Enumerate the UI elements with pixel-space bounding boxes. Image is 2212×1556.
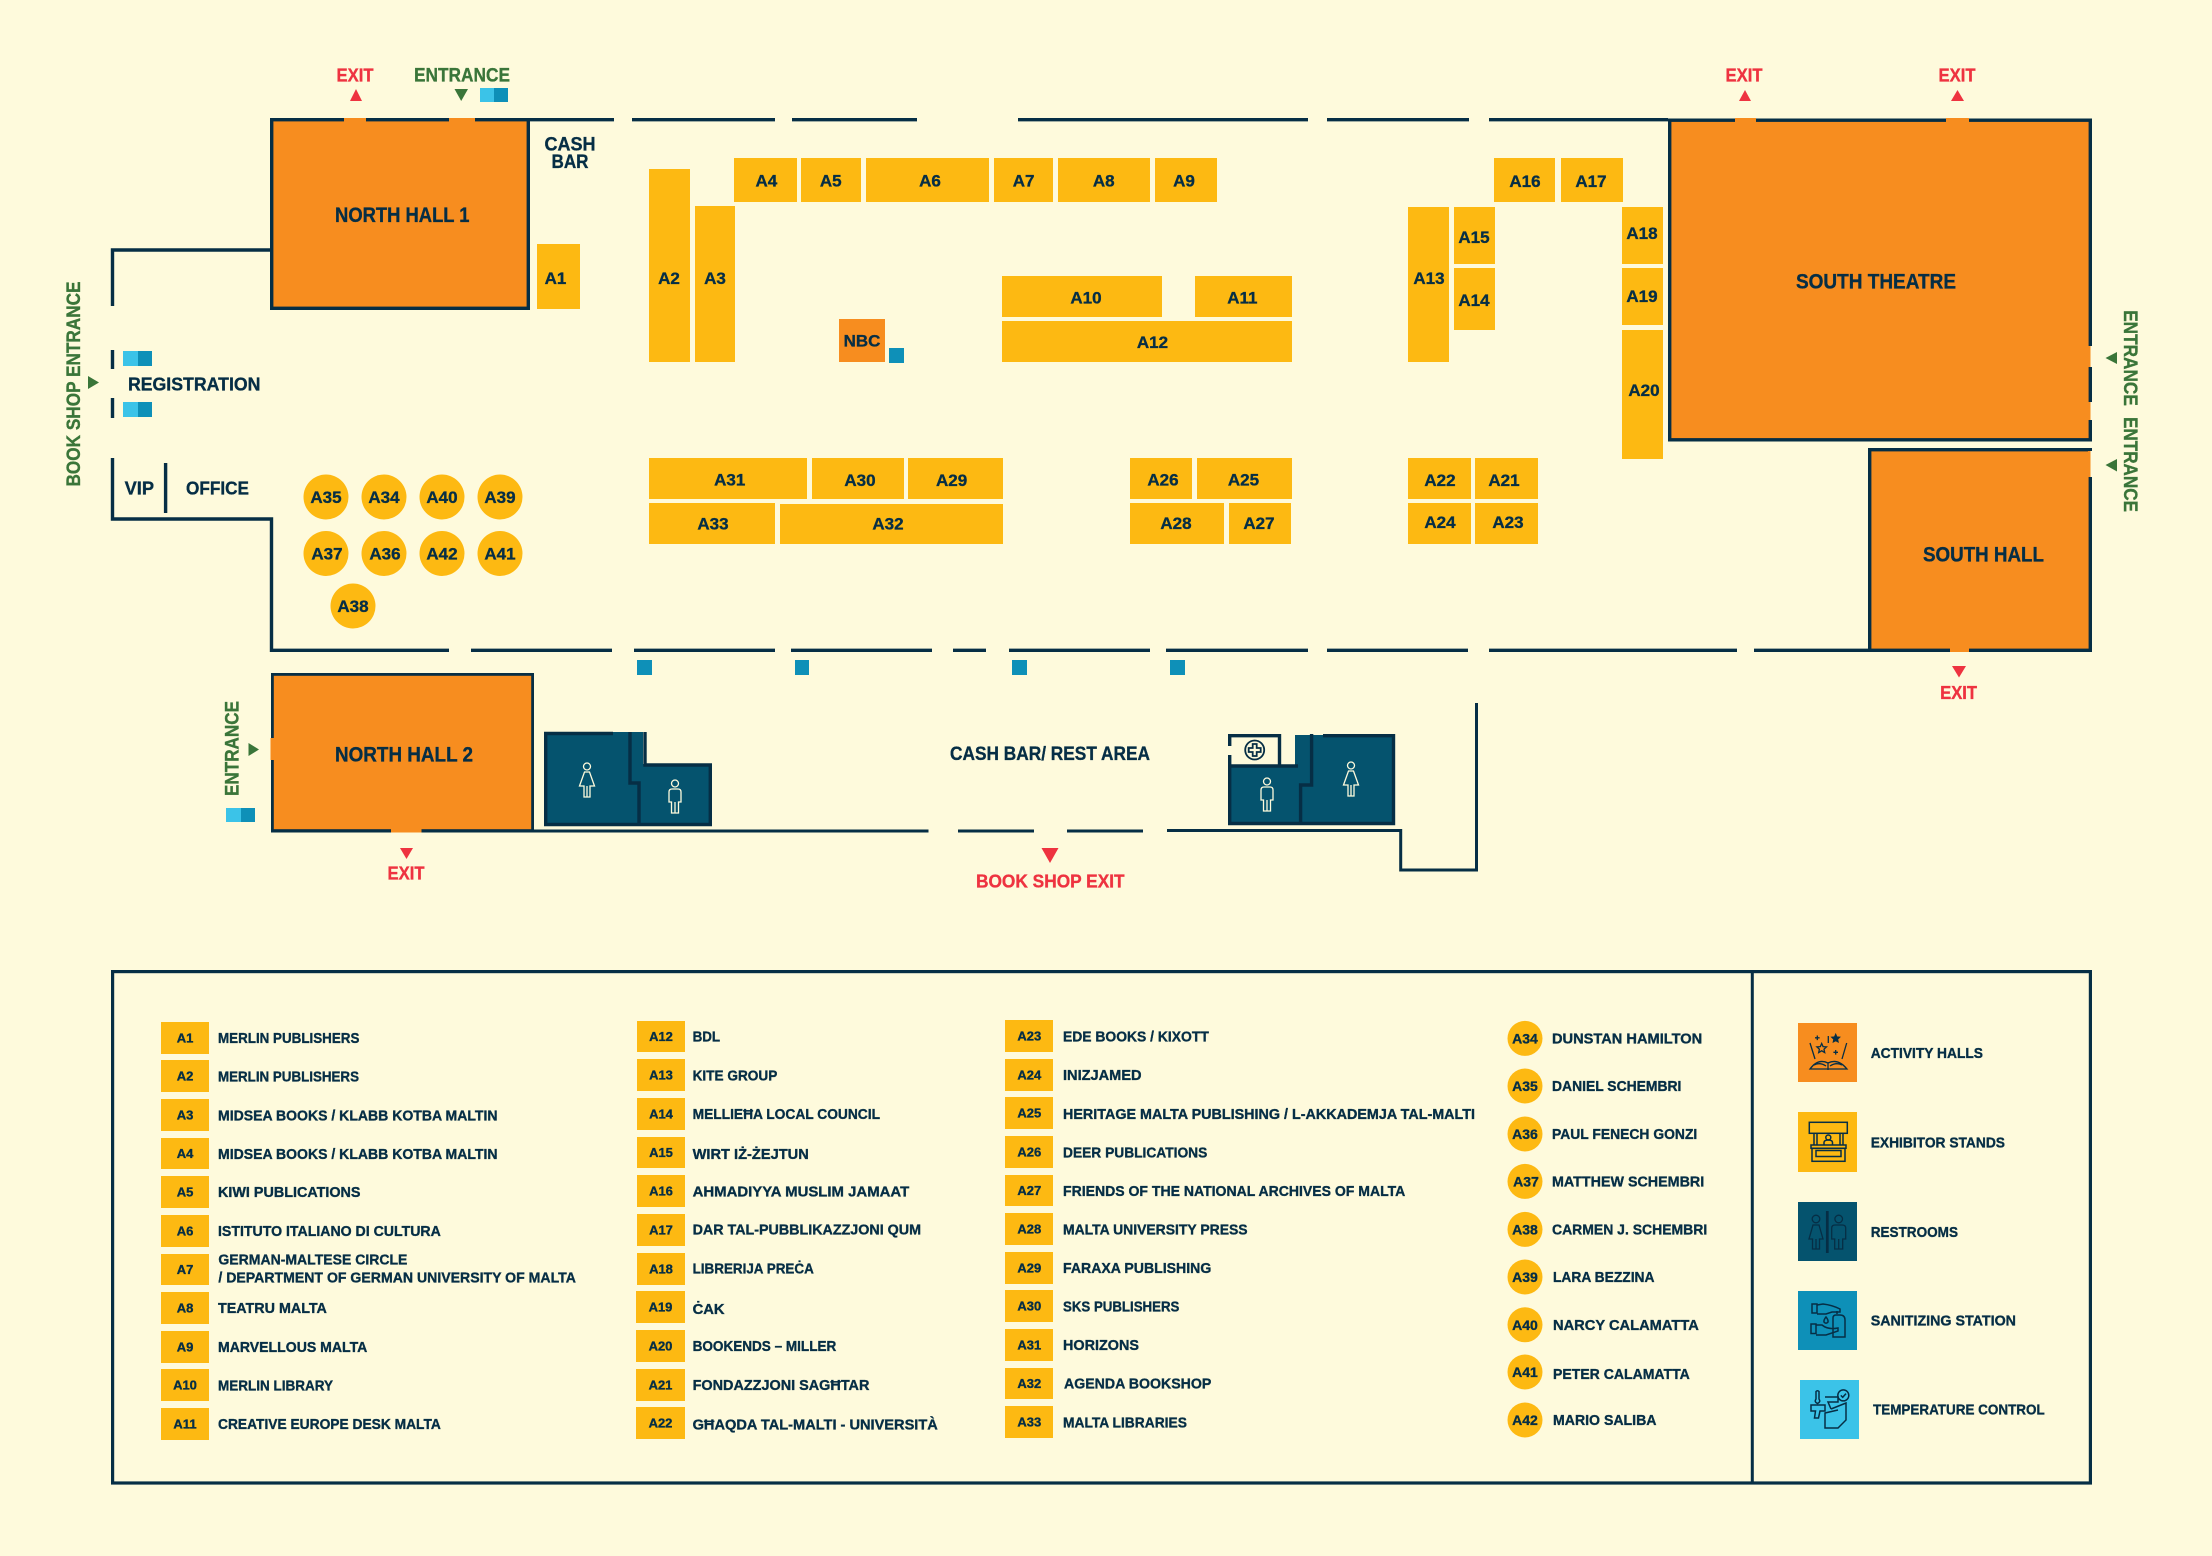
building walls [112,120,1868,870]
entrance label: south hall: ENTRANCE [2119,417,2140,512]
legend item A15: WIRT IŻ-ŻEJTUN [693,1146,809,1163]
stand A2 [649,169,690,362]
legend item A40: NARCY CALAMATTA [1553,1318,1699,1334]
stand A10: A10 [1070,289,1102,308]
entrance label: north hall 2 [222,701,259,796]
stand A31 [649,458,807,499]
legend item A11: CREATIVE EUROPE DESK MALTA [218,1417,441,1433]
stand A10 [1002,276,1162,317]
legend item A14: A14 [649,1107,674,1122]
stand A19 [1622,268,1663,325]
legend item A9 [161,1331,368,1363]
legend item A20: A20 [649,1339,672,1354]
key: exhibitor stands: EXHIBITOR STANDS [1871,1134,2005,1151]
legend item A26 [1005,1136,1208,1168]
stand A34: A34 [368,488,400,507]
stand A34 [362,474,406,520]
stand A32 [780,504,1003,544]
legend item A40: A40 [1512,1317,1538,1333]
stand A38 [330,584,376,628]
legend item A29: FARAXA PUBLISHING [1063,1261,1211,1277]
stand A42: A42 [426,544,458,564]
stand A36: A36 [369,544,401,564]
hall: South Theatre: SOUTH THEATRE [1796,270,1956,294]
legend item A22: A22 [649,1416,672,1431]
legend item A37 [1508,1164,1704,1199]
area label: cash bar: BAR [552,152,589,173]
exit label: north hall 2 [388,848,425,884]
legend item A36 [1508,1116,1697,1152]
key: restrooms: RESTROOMS [1871,1224,1958,1241]
legend item A16: AHMADIYYA MUSLIM JAMAAT [693,1185,909,1201]
legend item A39: LARA BEZZINA [1553,1270,1655,1286]
area label: registration: REGISTRATION [128,374,260,395]
legend item A36: PAUL FENECH GONZI [1552,1127,1697,1143]
legend item A31: A31 [1017,1338,1041,1353]
exit label: south hall: EXIT [1940,682,1978,703]
legend item A18 [637,1253,814,1285]
stand A36 [362,531,406,576]
legend item A39: A39 [1512,1269,1538,1285]
legend item A15: A15 [649,1145,673,1160]
exhibitor stands [304,158,1663,628]
legend item A6: ISTITUTO ITALIANO DI CULTURA [218,1224,441,1240]
legend item A22 [636,1407,938,1439]
legend item A11: A11 [173,1417,197,1432]
stand A42 [420,531,464,576]
stand A9: A9 [1173,172,1195,191]
stand A17: A17 [1575,172,1607,191]
stand A21: A21 [1488,471,1520,490]
legend item A18: A18 [649,1262,673,1277]
stand A38: A38 [337,597,369,616]
stand A27 [1229,503,1291,544]
legend item A7 [161,1252,576,1286]
legend item A34: DUNSTAN HAMILTON [1552,1031,1702,1047]
legend item A16: A16 [649,1184,673,1199]
legend item A12: A12 [649,1029,673,1044]
legend item A31 [1005,1329,1139,1361]
stand A28: A28 [1160,514,1192,533]
stand A2: A2 [658,269,680,288]
stand A24 [1408,503,1471,544]
legend item A21: FONDAZZJONI SAGĦTAR [693,1378,870,1394]
icon: hands and sanitizer bottle [1811,1304,1845,1337]
key: temperature control [1800,1380,2045,1439]
stand A16: A16 [1509,172,1541,191]
stand A12 [1002,321,1292,362]
legend item A33 [1005,1406,1187,1438]
stand A13: A13 [1413,269,1445,288]
legend item A25: HERITAGE MALTA PUBLISHING / L-AKKADEMJA TAL-MALTI [1063,1107,1475,1123]
stand A21 [1475,458,1538,499]
legend item A4: MIDSEA BOOKS / KLABB KOTBA MALTIN [218,1147,498,1163]
legend item A26: DEER PUBLICATIONS [1063,1145,1208,1161]
legend item A8: A8 [177,1301,193,1316]
stand A3 [695,206,735,362]
legend item A27 [1005,1175,1406,1206]
hall: South Theatre [1670,118,2094,440]
legend item A14: MELLIEĦA LOCAL COUNCIL [693,1107,880,1123]
legend item A2: MERLIN PUBLISHERS [218,1070,359,1086]
legend item A10: A10 [173,1378,197,1393]
area label: cash bar rest area: CASH BAR/ REST AREA [950,744,1150,765]
stand A40: A40 [426,488,458,507]
legend item A38 [1508,1212,1707,1247]
legend item A11 [161,1408,441,1440]
stand A26: A26 [1147,471,1179,490]
legend item A29: A29 [1017,1261,1041,1276]
stand A13 [1408,207,1449,362]
exit label: book shop [976,848,1125,892]
legend item A7: A7 [177,1262,193,1277]
area label: cash bar [544,134,596,173]
stand NBC [839,319,885,362]
legend item A7: GERMAN-MALTESE CIRCLE [218,1252,408,1268]
stand A29 [908,458,1003,499]
legend item A17: A17 [649,1223,673,1238]
legend item A10 [161,1369,333,1401]
stand A32: A32 [872,515,904,534]
exit label: north hall 2: EXIT [388,862,425,884]
temperature marker: north hall 2 [226,808,255,822]
stand A29: A29 [936,471,967,490]
stand A23 [1475,503,1538,544]
icon: female restroom [1344,762,1358,796]
stand A3: A3 [704,269,726,288]
stand A28 [1130,503,1224,544]
legend item A6 [161,1215,441,1247]
legend: stand list column 1 [161,1022,576,1440]
legend item A30: SKS PUBLISHERS [1063,1300,1180,1316]
entrance label: south theatre: ENTRANCE [2119,310,2140,406]
legend item A28: A28 [1017,1222,1041,1237]
legend item A10: MERLIN LIBRARY [218,1379,333,1395]
icon: thermometer and masked person [1811,1390,1849,1428]
stand A1: A1 [545,269,566,288]
temperature marker: registration lower [123,402,152,417]
key: sanitizing station [1798,1291,2016,1350]
legend item A35 [1508,1068,1681,1104]
hall: North Hall 1 [272,118,528,308]
stand A4: A4 [756,172,778,191]
legend item A8: TEATRU MALTA [218,1301,327,1317]
legend item A13 [637,1059,778,1091]
stand A33 [649,503,775,544]
legend item A31: HORIZONS [1063,1338,1139,1354]
key: sanitizing station: SANITIZING STATION [1871,1312,2016,1330]
area label: VIP: VIP [125,478,154,499]
stand A25 [1197,458,1292,499]
legend item A20 [636,1330,837,1362]
legend item A24: A24 [1017,1068,1042,1083]
legend item A37: A37 [1513,1173,1539,1189]
legend item A41: PETER CALAMATTA [1553,1367,1690,1383]
legend item A3 [161,1099,498,1131]
legend item A19: A19 [649,1300,672,1315]
legend item A13: KITE GROUP [693,1068,778,1084]
entrance label: south theatre [2106,310,2140,406]
key: activity halls: ACTIVITY HALLS [1871,1045,1983,1062]
legend item A3: A3 [177,1108,193,1123]
legend item A21: A21 [649,1378,672,1393]
entrance label: book shop: BOOK SHOP ENTRANCE [64,282,85,486]
stand A31: A31 [714,471,745,490]
legend item A23: A23 [1017,1029,1041,1044]
legend item A14 [637,1098,880,1130]
stand A18 [1622,207,1663,264]
stand A18: A18 [1626,224,1658,243]
stand A15: A15 [1458,228,1490,247]
stand A19: A19 [1626,287,1658,306]
legend item A25 [1005,1097,1475,1129]
entrance label: north hall 1: ENTRANCE [414,66,510,86]
stand A30: A30 [844,471,876,490]
legend item A35: A35 [1512,1078,1538,1094]
stand A8: A8 [1093,172,1115,191]
entrance label: book shop [64,282,99,486]
legend item A28: MALTA UNIVERSITY PRESS [1063,1222,1248,1238]
legend item A18: LIBRERIJA PREĊA [693,1261,814,1278]
legend item A1: A1 [177,1031,193,1046]
entrance label: north hall 2: ENTRANCE [222,701,244,796]
legend item A33: MALTA LIBRARIES [1063,1416,1187,1432]
stand A8 [1058,158,1150,202]
legend item A25: A25 [1017,1106,1041,1121]
legend item A41 [1508,1354,1690,1390]
legend item A23: EDE BOOKS / KIXOTT [1063,1030,1209,1046]
legend: stand list column 3 [1005,1020,1475,1438]
legend item A35: DANIEL SCHEMBRI [1552,1079,1681,1095]
legend item A34 [1508,1021,1702,1056]
legend item A13: A13 [649,1068,673,1083]
stand A26 [1130,458,1192,499]
stand A1 [537,244,580,309]
stand A41 [478,531,522,576]
panel: legend frame [113,971,2090,1484]
area label: cash bar: CASH [544,134,596,156]
stand A35 [304,474,348,520]
legend: key [1798,1023,2045,1439]
legend item A22: GĦAQDA TAL-MALTI - UNIVERSITÀ [693,1416,938,1434]
stand A14 [1454,268,1495,330]
hall: North Hall 2: NORTH HALL 2 [335,744,473,766]
exit label: south theatre right: EXIT [1938,64,1976,86]
legend item A17: DAR TAL-PUBBLIKAZZJONI QUM [693,1222,921,1238]
legend item A27: A27 [1017,1183,1041,1198]
legend item A36: A36 [1512,1126,1538,1142]
stand A22 [1408,458,1471,499]
legend item A27: FRIENDS OF THE NATIONAL ARCHIVES OF MALTA [1063,1184,1406,1200]
legend item A8 [161,1292,327,1324]
stand A39 [478,474,522,520]
legend item A32 [1005,1368,1212,1399]
legend item A1: MERLIN PUBLISHERS [218,1031,360,1047]
hall: North Hall 1: NORTH HALL 1 [335,204,470,227]
exit label: south theatre right [1938,64,1976,101]
icon: market stall [1809,1122,1847,1161]
legend item A5: A5 [177,1185,193,1200]
exit label: south theatre left: EXIT [1726,64,1763,86]
area label: office: OFFICE [186,478,249,499]
legend item A9: MARVELLOUS MALTA [218,1340,368,1356]
legend item A21 [636,1369,870,1401]
legend item A6: A6 [177,1224,193,1239]
legend item A5 [161,1176,361,1208]
legend item A34: A34 [1512,1030,1538,1046]
legend item A33: A33 [1017,1415,1041,1430]
stand A7: A7 [1013,172,1034,191]
legend item A19: ĊAK [693,1301,725,1318]
stand A20 [1622,330,1663,459]
icon: restroom people [1809,1211,1846,1253]
stand A17 [1561,158,1623,202]
legend item A29 [1005,1252,1211,1284]
legend item A42: A42 [1512,1412,1538,1428]
stand A30 [812,458,904,499]
legend item A15 [637,1137,809,1168]
temperature marker: registration upper [123,351,152,366]
hall: North Hall 2 [270,674,533,832]
stand A22: A22 [1424,471,1456,490]
legend item A12: BDL [693,1030,720,1046]
legend item A42: MARIO SALIBA [1553,1413,1657,1429]
legend item A1 [161,1022,360,1054]
legend item A20: BOOKENDS – MILLER [693,1339,837,1355]
stand A12: A12 [1137,333,1168,352]
stand A9 [1155,158,1217,202]
legend item A12 [637,1021,720,1052]
legend item A5: KIWI PUBLICATIONS [218,1185,361,1201]
stand A41: A41 [484,544,516,564]
legend: stand list column 4 [1508,1021,1707,1438]
stand NBC: NBC [844,332,880,350]
stand A6: A6 [919,172,941,191]
restrooms: north [544,732,712,826]
legend item A2 [161,1060,359,1092]
key: activity halls [1798,1023,1983,1082]
temperature marker: north hall 1 [480,88,508,102]
stand A37: A37 [311,544,343,564]
icon: open book with stars [1810,1034,1847,1070]
legend item A17 [637,1214,921,1246]
exit label: book shop: BOOK SHOP EXIT [976,870,1125,892]
restrooms and first aid: south [1228,734,1395,825]
icon: male restroom [669,780,681,813]
legend item A30 [1005,1290,1180,1322]
stand A40 [420,474,464,520]
stand A7 [994,158,1053,202]
legend item A38: A38 [1512,1221,1538,1237]
icon: first aid [1245,740,1264,760]
exit label: north hall 1: EXIT [336,64,374,86]
legend item A19 [636,1291,725,1323]
stand A33: A33 [697,515,729,534]
stand A14: A14 [1458,291,1490,310]
key: exhibitor stands [1798,1112,2005,1172]
legend item A32: AGENDA BOOKSHOP [1064,1377,1212,1393]
exit label: south theatre left [1726,64,1763,101]
stand A5: A5 [820,172,842,191]
stand A24: A24 [1424,513,1456,532]
stand A20: A20 [1628,381,1660,400]
legend item A4: A4 [177,1146,194,1161]
legend item A28 [1005,1213,1248,1245]
legend item A3: MIDSEA BOOKS / KLABB KOTBA MALTIN [218,1108,498,1124]
legend: stand list column 2 [636,1021,938,1439]
stand A25: A25 [1228,471,1259,490]
stand A37 [304,531,348,576]
sanitizing stations [637,348,1185,675]
legend item A24 [1005,1059,1142,1091]
key: temperature control: TEMPERATURE CONTROL [1873,1402,2045,1418]
stand A35: A35 [310,488,342,507]
stand A39: A39 [484,488,516,507]
hall: South Hall: SOUTH HALL [1923,544,2044,566]
legend item A41: A41 [1512,1364,1538,1380]
legend item A38: CARMEN J. SCHEMBRI [1552,1222,1707,1238]
stand A6 [866,158,989,202]
exit label: north hall 1 [336,64,374,101]
legend item A24: INIZJAMED [1063,1068,1142,1084]
hall: South Hall [1870,450,2094,652]
legend item A39 [1508,1260,1655,1294]
legend item A26: A26 [1017,1145,1041,1160]
stand A15 [1454,207,1495,264]
legend item A32: A32 [1017,1376,1041,1391]
icon: female restroom [580,763,594,797]
legend item A37: MATTHEW SCHEMBRI [1552,1174,1704,1190]
legend item A2: A2 [177,1069,193,1084]
legend item A30: A30 [1017,1299,1041,1314]
stand A5 [801,158,861,202]
stand A27: A27 [1243,514,1275,533]
icon: male restroom [1261,778,1273,811]
stand A11 [1195,276,1292,317]
legend item A7: / DEPARTMENT OF GERMAN UNIVERSITY OF MALTA [218,1270,576,1286]
legend item A16 [637,1175,909,1207]
entrance label: south hall [2106,417,2140,512]
exit label: south hall [1940,666,1978,703]
legend item A42 [1508,1402,1657,1438]
legend item A40 [1508,1307,1699,1342]
legend item A23 [1005,1020,1209,1052]
legend item A4 [161,1138,498,1169]
key: restrooms [1798,1202,1958,1261]
entrance label: north hall 1 [414,66,510,101]
stand A16 [1494,158,1555,202]
stand A4 [734,158,797,202]
legend item A9: A9 [177,1340,193,1355]
stand A23: A23 [1492,513,1524,532]
stand A11: A11 [1227,289,1258,308]
